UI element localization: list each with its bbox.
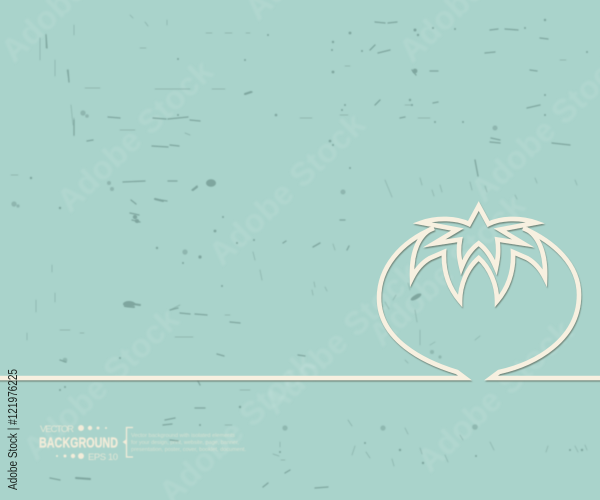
tomato calyx star: [421, 206, 536, 268]
badge lower dots: [56, 453, 84, 459]
vector background badge: [39, 424, 246, 463]
badge description: [131, 433, 246, 453]
watermark pattern: Adobe Stock: [255, 254, 426, 421]
badge vector label: VECTOR: [40, 424, 74, 435]
tomato line illustration and baseline: [0, 206, 600, 378]
watermark pattern: Adobe Stock: [15, 300, 186, 467]
badge eps label: EPS 10: [88, 452, 118, 463]
badge description: for your design, print, website, page, banner,: [131, 440, 239, 446]
baseline with tomato left side: [0, 228, 465, 378]
badge heading: BACKGROUND: [39, 436, 118, 452]
baseline with tomato right side: [491, 228, 600, 378]
badge description: Vector background with isolated elements: [131, 433, 235, 439]
badge upper dots: [78, 425, 107, 431]
watermark pattern: Adobe Stock: [409, 312, 580, 479]
watermark pattern: Adobe Stock: [361, 186, 532, 353]
watermark pattern: Adobe Stock: [49, 52, 220, 219]
tomato calyx lower leaves: [412, 229, 545, 301]
bracket: [122, 428, 133, 457]
watermark pattern: Adobe Stock: [201, 105, 372, 272]
stock id caption: Adobe Stock | #121976225: [5, 369, 20, 490]
badge description: presentation, poster, cover, booklet, document.: [131, 447, 246, 453]
